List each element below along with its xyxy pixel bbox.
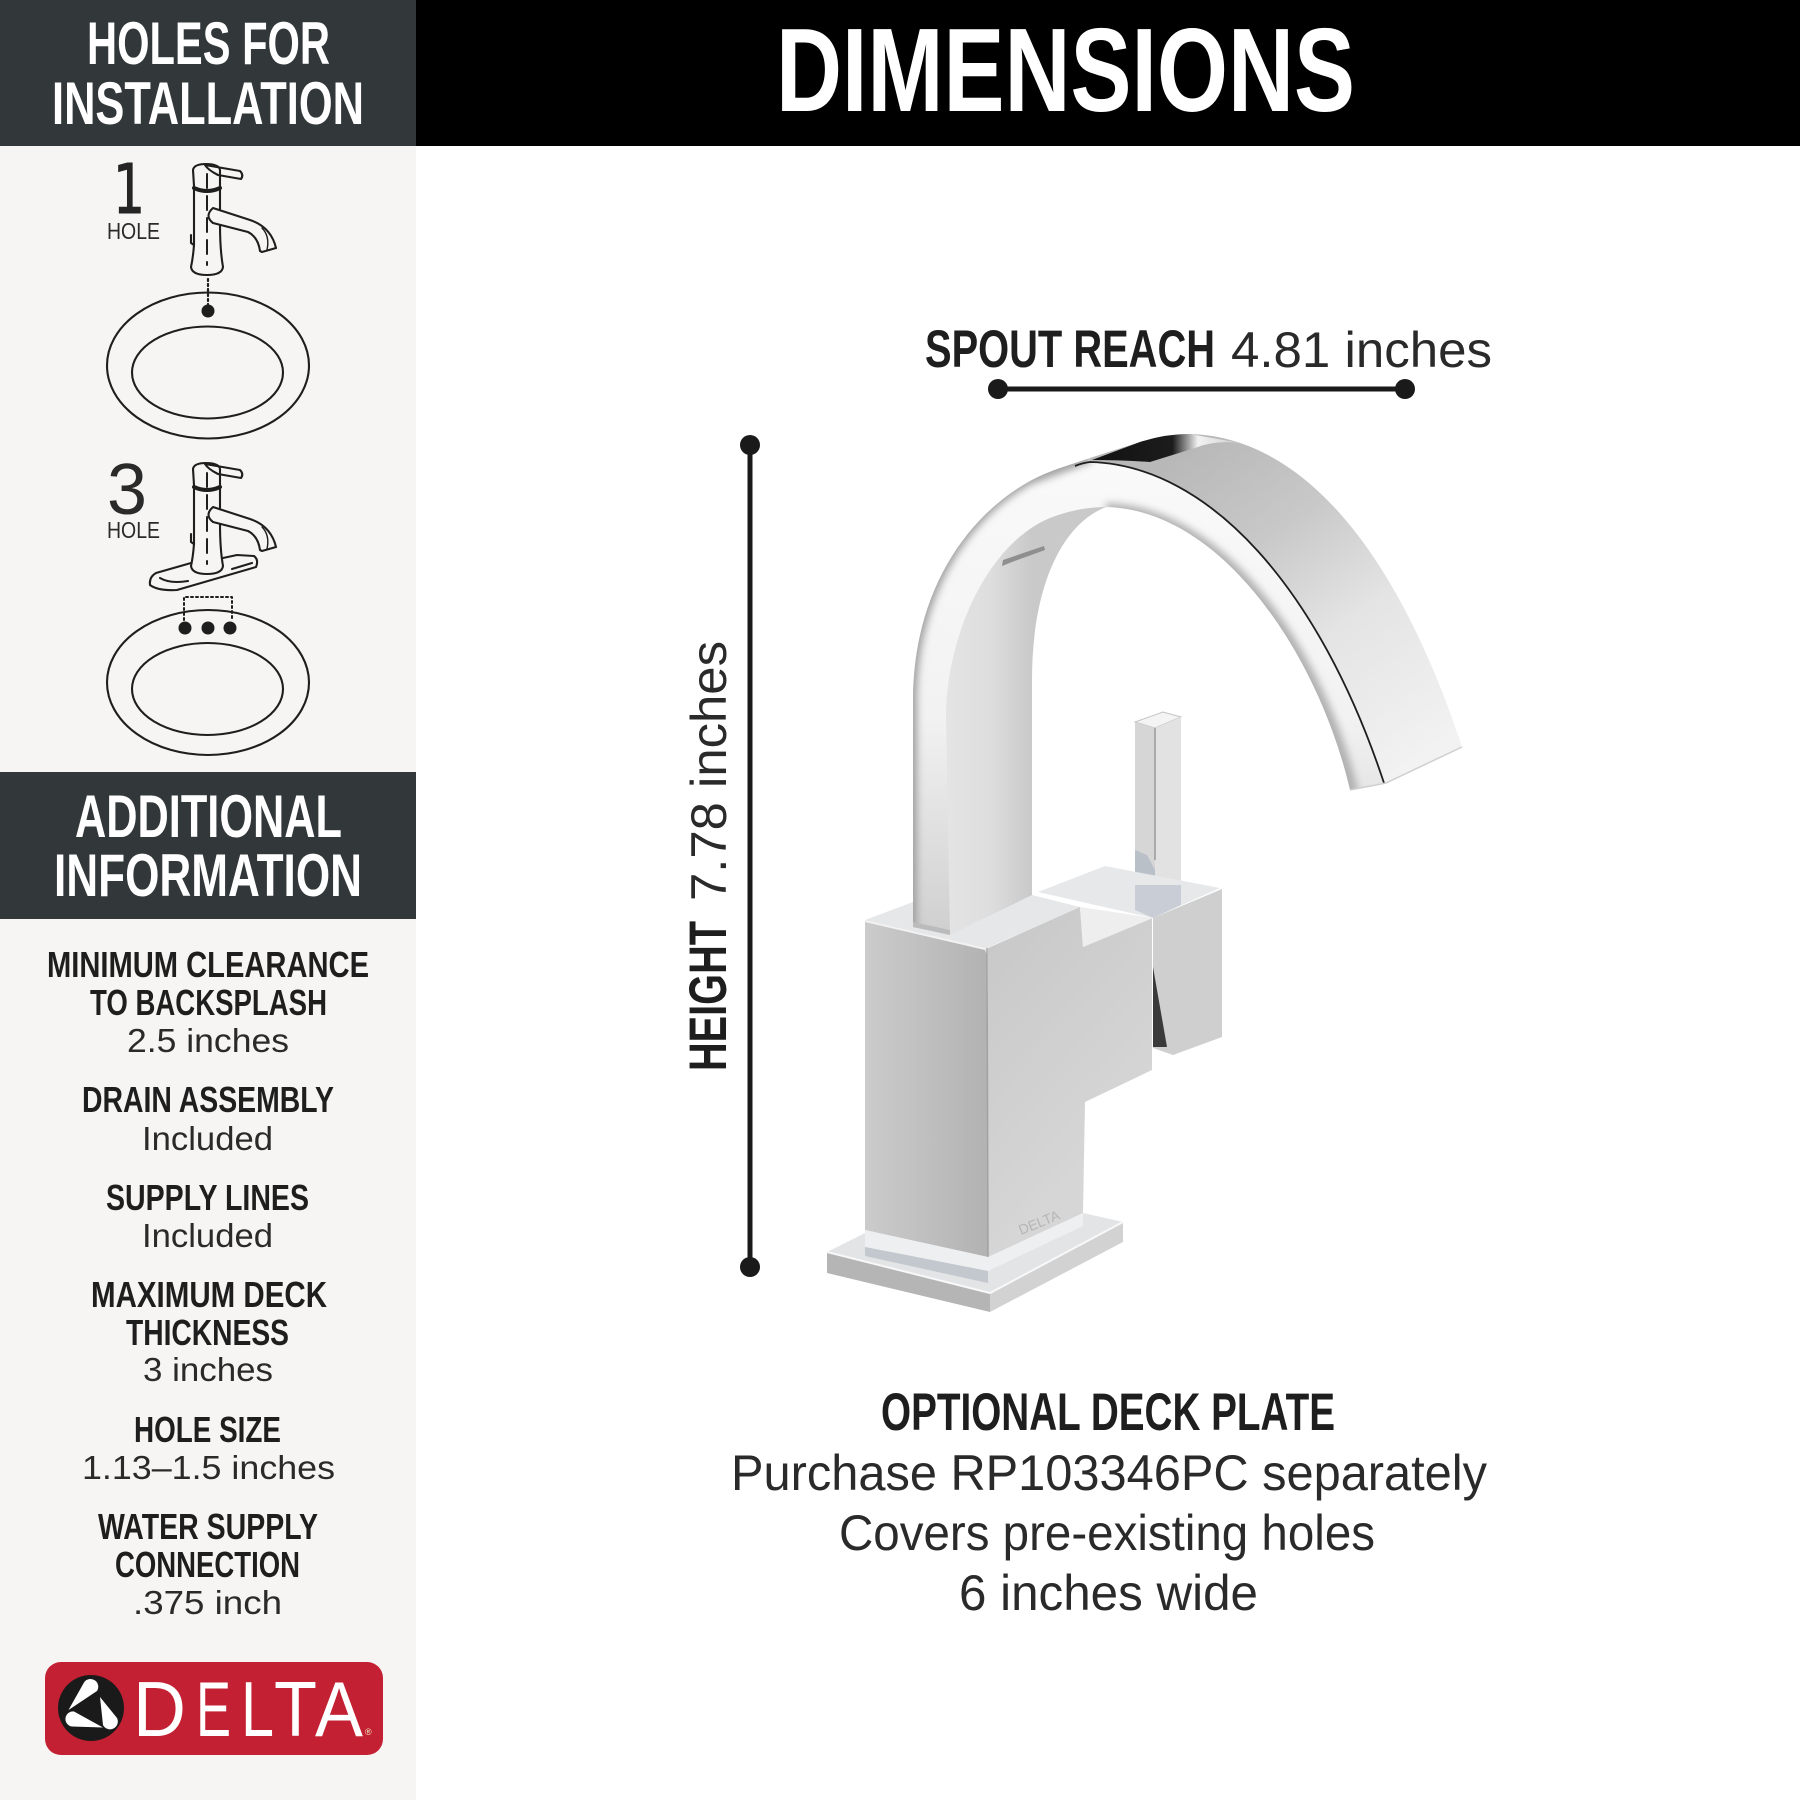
header: additional information: INFORMATION [54, 842, 362, 909]
spec: water supply connection [98, 1506, 318, 1621]
logo: delta: ® [365, 1727, 372, 1737]
spec: hole size: HOLE SIZE [134, 1409, 281, 1450]
faucet body: DELTA [1016, 1207, 1063, 1238]
text block: optional deck plate: Covers pre-existing holes [839, 1505, 1375, 1561]
label: 1 hole: 1 [113, 150, 145, 230]
header bar: dimensions [416, 0, 1800, 146]
label: 3 hole: 3 [107, 450, 147, 530]
label: 1 hole: HOLE [107, 218, 160, 244]
spec: supply lines [106, 1177, 309, 1254]
spout shading [910, 455, 1352, 930]
spec: supply lines: Included [142, 1217, 273, 1254]
faucet spout [910, 434, 1462, 935]
spec: hole size: 1.13–1.5 inches [82, 1449, 335, 1486]
header: holes for installation: INSTALLATION [52, 70, 364, 137]
spec: water supply connection: .375 inch [133, 1584, 282, 1621]
faucet base plate [827, 1213, 1123, 1312]
logo: delta: D [133, 1665, 186, 1753]
spec: supply lines: SUPPLY LINES [106, 1177, 309, 1218]
label: 3 hole [107, 450, 160, 543]
spec: drain assembly: Included [142, 1120, 273, 1157]
header: holes for installation [0, 0, 416, 146]
logo: delta: T [274, 1665, 317, 1753]
logo: delta: A [315, 1665, 363, 1753]
spec: drain assembly [82, 1079, 334, 1157]
sidebar background [0, 0, 416, 1800]
spec: maximum deck thickness: THICKNESS [126, 1312, 289, 1353]
dimension: height: HEIGHT [679, 921, 738, 1071]
handle block [1038, 866, 1222, 1055]
spout top face [1090, 434, 1462, 783]
spec: water supply connection: CONNECTION [115, 1544, 300, 1585]
faucet illustration [827, 434, 1462, 1312]
spec: maximum deck thickness: MAXIMUM DECK [91, 1274, 327, 1315]
spec: minimum clearance: TO BACKSPLASH [90, 982, 327, 1023]
dimension: spout reach: SPOUT REACH [925, 320, 1215, 379]
spec: maximum deck thickness [91, 1274, 327, 1388]
dimension: spout reach: 4.81 inches [1231, 322, 1492, 378]
spec: water supply connection: WATER SUPPLY [98, 1506, 318, 1547]
faucet handle [1135, 712, 1181, 890]
spec: maximum deck thickness: 3 inches [143, 1351, 273, 1388]
logo: delta [45, 1662, 383, 1755]
spec: minimum clearance [47, 944, 369, 1059]
dimension: spout reach [925, 320, 1492, 399]
spec: hole size [82, 1409, 335, 1486]
logo: delta: E [196, 1665, 231, 1753]
icon: faucet with deck plate [150, 463, 276, 620]
text block: optional deck plate: 6 inches wide [959, 1565, 1258, 1621]
spec: minimum clearance: 2.5 inches [127, 1022, 289, 1059]
title: DIMENSIONS [776, 4, 1355, 137]
spout inner face [946, 507, 1106, 935]
icon: single hole faucet [191, 164, 276, 305]
header: additional information: ADDITIONAL [75, 783, 342, 850]
dimension: height [679, 435, 760, 1277]
icon: three hole sink [107, 610, 309, 755]
text block: additional information list [47, 944, 369, 1621]
panel: three hole installation diagram [107, 450, 309, 755]
text block: optional deck plate: Purchase RP103346PC separately [731, 1445, 1487, 1501]
header: additional information [0, 772, 416, 919]
dimension: height: 7.78 inches [681, 641, 737, 901]
header: holes for installation: HOLES FOR [87, 10, 330, 77]
text block: optional deck plate [731, 1383, 1487, 1621]
icon: single hole sink [107, 292, 309, 438]
label: 3 hole: HOLE [107, 517, 160, 543]
text block: optional deck plate: OPTIONAL DECK PLATE [881, 1383, 1335, 1442]
panel: one hole installation diagram [107, 150, 309, 438]
logo: delta: L [241, 1665, 274, 1753]
spec: minimum clearance: MINIMUM CLEARANCE [47, 944, 369, 985]
spec: drain assembly: DRAIN ASSEMBLY [82, 1079, 334, 1120]
faucet body [865, 895, 1153, 1283]
